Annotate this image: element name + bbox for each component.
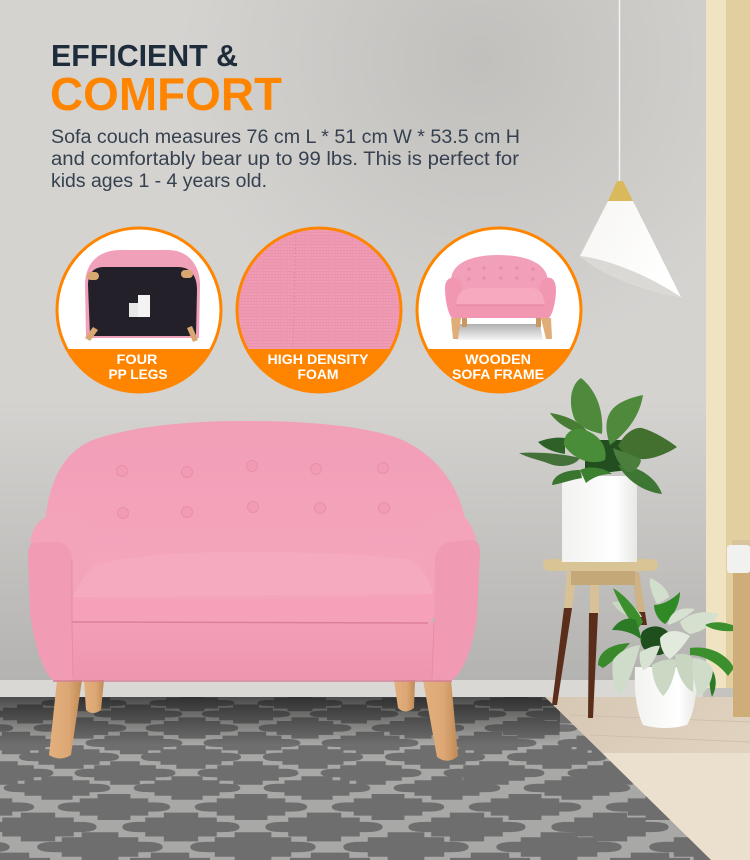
description text: kids ages 1 - 4 years old. — [51, 171, 267, 192]
pendant lamp — [580, 0, 681, 297]
icon: sofa underside — [85, 250, 200, 342]
badge: four pp legs: PP LEGS — [108, 366, 168, 382]
title: COMFORT — [50, 68, 282, 120]
description text: Sofa couch measures 76 cm L * 51 cm W * 53.5 cm H — [51, 127, 520, 148]
badge: four pp legs: FOUR — [116, 351, 158, 367]
small silver-leaf plant — [598, 578, 742, 728]
seat top — [73, 552, 433, 597]
tufted buttons — [116, 460, 390, 518]
large plant leaves — [519, 378, 677, 494]
sofa legs — [49, 680, 458, 761]
main pink sofa — [28, 421, 480, 761]
round white pot — [635, 667, 697, 728]
badge: wooden sofa frame — [410, 228, 590, 399]
right arm side — [423, 510, 477, 597]
title — [50, 38, 282, 120]
badge: wooden sofa frame: SOFA FRAME — [452, 366, 544, 382]
skirting board — [0, 680, 710, 698]
large white planter — [562, 476, 637, 562]
patterned rug — [0, 695, 750, 860]
fabric swatch — [238, 230, 400, 349]
laundry basket — [727, 540, 750, 717]
side table — [543, 559, 658, 718]
description text: and comfortably bear up to 99 lbs. This is perfect for — [51, 149, 520, 170]
badge: four pp legs — [50, 228, 230, 399]
badge: high density foam: HIGH DENSITY — [268, 351, 369, 367]
badge: high density foam: FOAM — [298, 366, 338, 382]
curtain — [703, 0, 750, 707]
sofa back — [45, 421, 465, 600]
title: EFFICIENT & — [51, 38, 238, 73]
badge: wooden sofa frame: WOODEN — [465, 351, 531, 367]
left arm side — [30, 511, 89, 597]
badge: high density foam — [236, 226, 402, 394]
seat cushion front — [72, 594, 435, 623]
description text — [51, 127, 520, 192]
icon: mini sofa — [445, 255, 556, 340]
wooden floor — [545, 697, 750, 860]
left arm front — [28, 542, 73, 681]
right arm front — [432, 540, 480, 681]
sofa body front — [72, 622, 434, 680]
